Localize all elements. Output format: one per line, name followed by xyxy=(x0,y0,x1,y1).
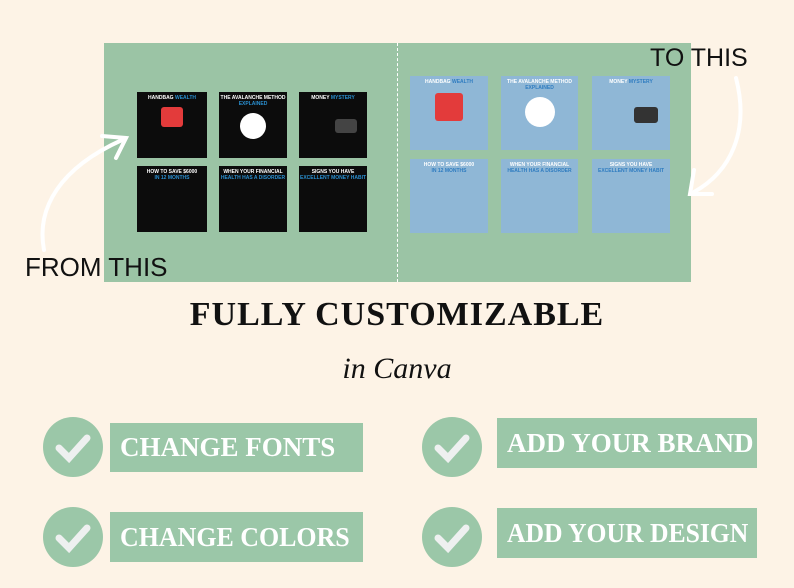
tile: signs: EXCELLENT MONEY HABIT xyxy=(300,175,366,181)
tile: save 6000: HOW TO SAVE $6000 xyxy=(147,169,197,175)
icon: check xyxy=(43,507,103,567)
box: CHANGE FONTS xyxy=(120,432,335,462)
tile: handbag wealth xyxy=(137,92,207,158)
box xyxy=(110,512,363,562)
tile: signs blue: SIGNS YOU HAVE xyxy=(610,162,652,168)
label: from this: FROM THIS xyxy=(25,252,168,282)
tile: signs blue xyxy=(592,159,670,233)
tile: money mystery blue xyxy=(592,76,670,150)
box xyxy=(110,423,363,472)
tile: avalanche blue: THE AVALANCHE METHOD xyxy=(507,79,572,85)
black tiles: from xyxy=(137,92,367,232)
box: ADD YOUR BRAND xyxy=(507,428,754,458)
tile: save 6000: IN 12 MONTHS xyxy=(154,175,190,181)
tile: save blue: IN 12 MONTHS xyxy=(431,168,466,174)
tile: money mystery blue: MONEY MYSTERY xyxy=(609,79,653,85)
tile: financial blue: HEALTH HAS A DISORDER xyxy=(507,168,572,174)
box xyxy=(497,418,757,468)
tile: handbag wealth blue xyxy=(410,76,488,150)
tile: avalanche xyxy=(219,92,287,158)
icon: check xyxy=(43,417,103,477)
arrow: from xyxy=(40,134,129,252)
tile: money mystery: MONEY MYSTERY xyxy=(311,95,355,101)
tile: save blue xyxy=(410,159,488,233)
tile: handbag wealth: HANDBAG WEALTH xyxy=(148,95,196,101)
tile: signs: SIGNS YOU HAVE xyxy=(312,169,354,175)
tile: financial health: WHEN YOUR FINANCIAL xyxy=(223,169,283,175)
box: ADD YOUR DESIGN xyxy=(507,518,748,548)
item: change colors xyxy=(43,507,363,567)
tile: financial health xyxy=(219,166,287,232)
subtitle: in Canva xyxy=(342,352,452,385)
title: FULLY CUSTOMIZABLE xyxy=(190,296,604,333)
tile: save blue: HOW TO SAVE $6000 xyxy=(424,162,474,168)
tile: handbag wealth blue: HANDBAG WEALTH xyxy=(425,79,473,85)
arrow: to xyxy=(688,76,742,196)
tile: financial blue xyxy=(501,159,578,233)
tile: signs xyxy=(299,166,367,232)
item: change fonts xyxy=(43,417,363,477)
panel: green preview xyxy=(104,43,691,282)
item: add brand xyxy=(422,417,757,477)
box xyxy=(497,508,757,558)
icon: check xyxy=(422,417,482,477)
tile: money mystery xyxy=(299,92,367,158)
item: add design xyxy=(422,507,757,567)
divider dashed xyxy=(397,43,398,282)
icon: check xyxy=(422,507,482,567)
tile: signs blue: EXCELLENT MONEY HABIT xyxy=(598,168,664,174)
tile: avalanche: EXPLAINED xyxy=(239,101,267,107)
tile: financial blue: WHEN YOUR FINANCIAL xyxy=(510,162,569,168)
box: CHANGE COLORS xyxy=(120,522,350,552)
tile: save 6000 xyxy=(137,166,207,232)
tile: financial health: HEALTH HAS A DISORDER xyxy=(221,175,285,181)
tile: avalanche: THE AVALANCHE METHOD xyxy=(221,95,285,101)
tile: avalanche blue xyxy=(501,76,578,150)
tile: avalanche blue: EXPLAINED xyxy=(525,85,554,91)
label: to this: TO THIS xyxy=(650,44,748,72)
blue tiles: to xyxy=(410,76,670,233)
